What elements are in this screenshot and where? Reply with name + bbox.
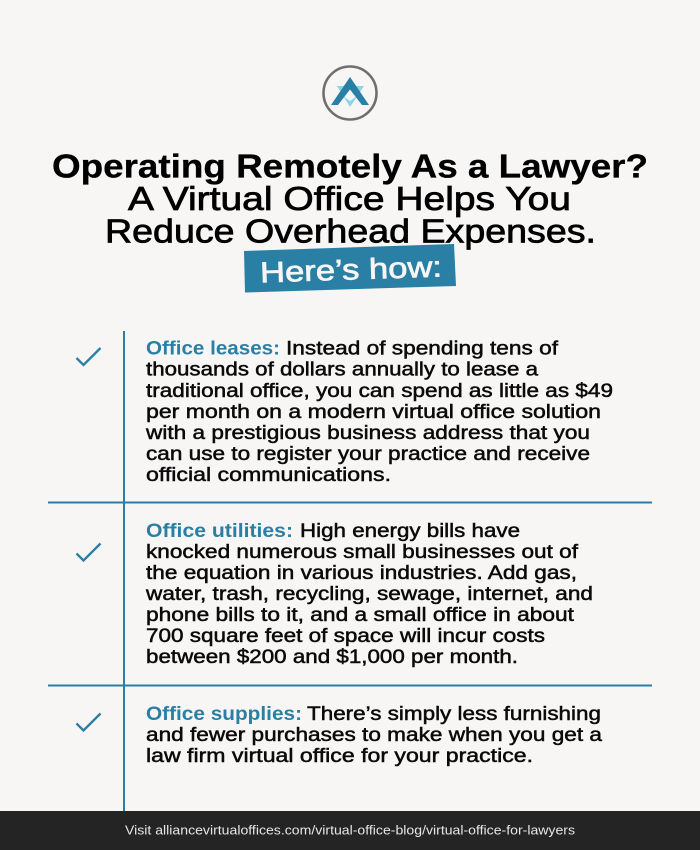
panel: office supplies: There’s simply less furnishing — [307, 703, 601, 725]
panel: office leases — [145, 338, 613, 486]
panel: office leases: can use to register your practice and receive — [146, 443, 590, 465]
panel: office leases: thousands of dollars annually to lease a — [146, 358, 538, 380]
panel: office utilities: the equation in various industries. Add gas, — [146, 562, 577, 584]
footer bar — [0, 811, 700, 850]
panel: office utilities: 700 square feet of space will incur costs — [146, 625, 545, 647]
panel: office leases: traditional office, you can spend as little as $49 — [146, 380, 613, 402]
panel: office supplies: Office supplies: — [146, 703, 302, 725]
icon: check 2 — [76, 544, 100, 560]
panel: office supplies: and fewer purchases to make when you get a — [146, 724, 602, 746]
footer bar: Visit alliancevirtualoffices.com/virtual-office-blog/virtual-office-for-lawyers — [125, 824, 575, 838]
panel: office supplies — [146, 703, 602, 767]
icon: check 1 — [76, 348, 100, 365]
panel: office supplies: law firm virtual office for your practice. — [146, 745, 533, 767]
panel: office utilities: phone bills to it, and a small office in about — [146, 604, 575, 626]
badge: Here's how: Here’s how: — [260, 251, 442, 289]
logo — [324, 66, 376, 120]
title: Reduce Overhead Expenses. — [105, 212, 596, 250]
panel: office utilities: High energy bills have — [300, 520, 520, 542]
panel: office utilities — [145, 520, 593, 668]
panel: office utilities: between $200 and $1,000 per month. — [146, 646, 518, 668]
panel: office utilities: knocked numerous small businesses out of — [146, 541, 579, 563]
badge: Here's how — [244, 244, 456, 292]
panel: office leases: Instead of spending tens of — [286, 338, 559, 360]
panel: office leases: official communications. — [146, 464, 391, 486]
icon: check 3 — [76, 714, 100, 730]
panel: office utilities: Office utilities: — [146, 520, 293, 542]
panel: office leases: Office leases: — [146, 338, 280, 360]
title — [52, 148, 648, 250]
panel: office leases: per month on a modern virtual office solution — [146, 401, 601, 423]
panel: office leases: with a prestigious business address that you — [145, 422, 590, 444]
panel: office utilities: water, trash, recycling, sewage, internet, and — [145, 583, 593, 605]
title: A Virtual Office Helps You — [128, 180, 571, 217]
dividers — [48, 331, 652, 811]
title: Operating Remotely As a Lawyer? — [52, 148, 648, 184]
